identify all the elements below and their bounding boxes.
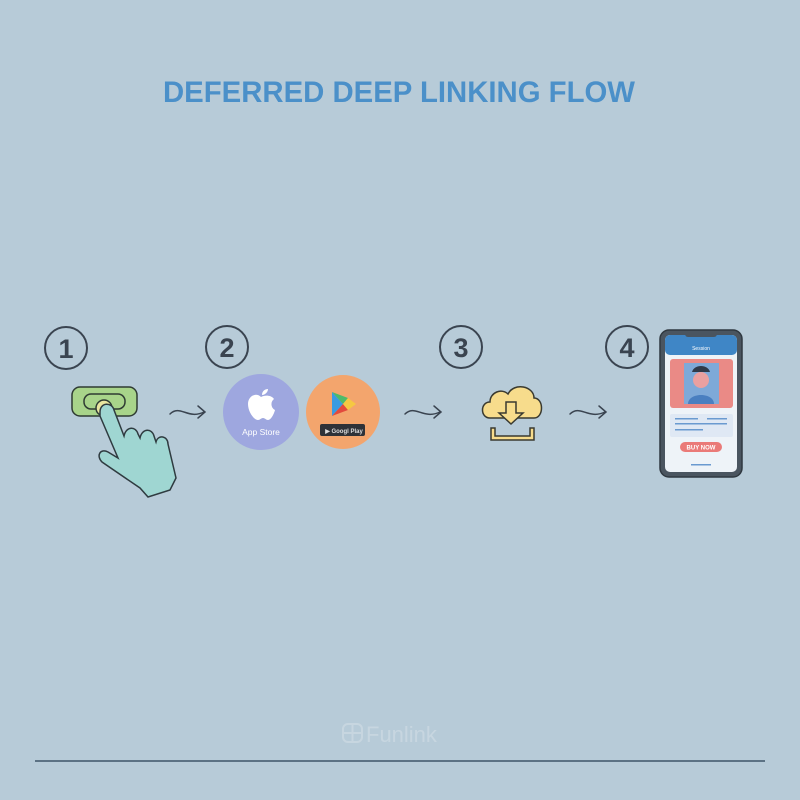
step 4 number bbox=[606, 326, 648, 368]
icon: Google Play bbox=[306, 375, 380, 449]
step 2 number: 2 bbox=[219, 333, 235, 363]
step 4 number: 4 bbox=[619, 333, 635, 363]
step 3 number bbox=[440, 326, 482, 368]
icon: cloud download bbox=[482, 387, 542, 440]
step 1 number bbox=[45, 327, 87, 369]
step 2 number bbox=[206, 326, 248, 368]
step 3 number: 3 bbox=[453, 333, 469, 363]
title: DEFERRED DEEP LINKING FLOW bbox=[163, 76, 636, 109]
step 1 number: 1 bbox=[58, 334, 74, 364]
icon: phone with product page bbox=[660, 330, 742, 477]
icon: phone with product page: Session bbox=[692, 346, 710, 352]
arrow 2 bbox=[405, 406, 441, 418]
icon: App Store: App Store bbox=[242, 427, 280, 437]
icon: button tap with hand bbox=[72, 387, 176, 497]
icon: phone with product page: BUY NOW bbox=[687, 446, 716, 452]
arrow 3 bbox=[570, 406, 606, 418]
arrow 1 bbox=[170, 406, 205, 418]
icon: Google Play: ▶ Googl Play bbox=[324, 428, 363, 435]
logo: Funlink: Funlink bbox=[366, 722, 438, 747]
icon: App Store bbox=[223, 374, 299, 450]
